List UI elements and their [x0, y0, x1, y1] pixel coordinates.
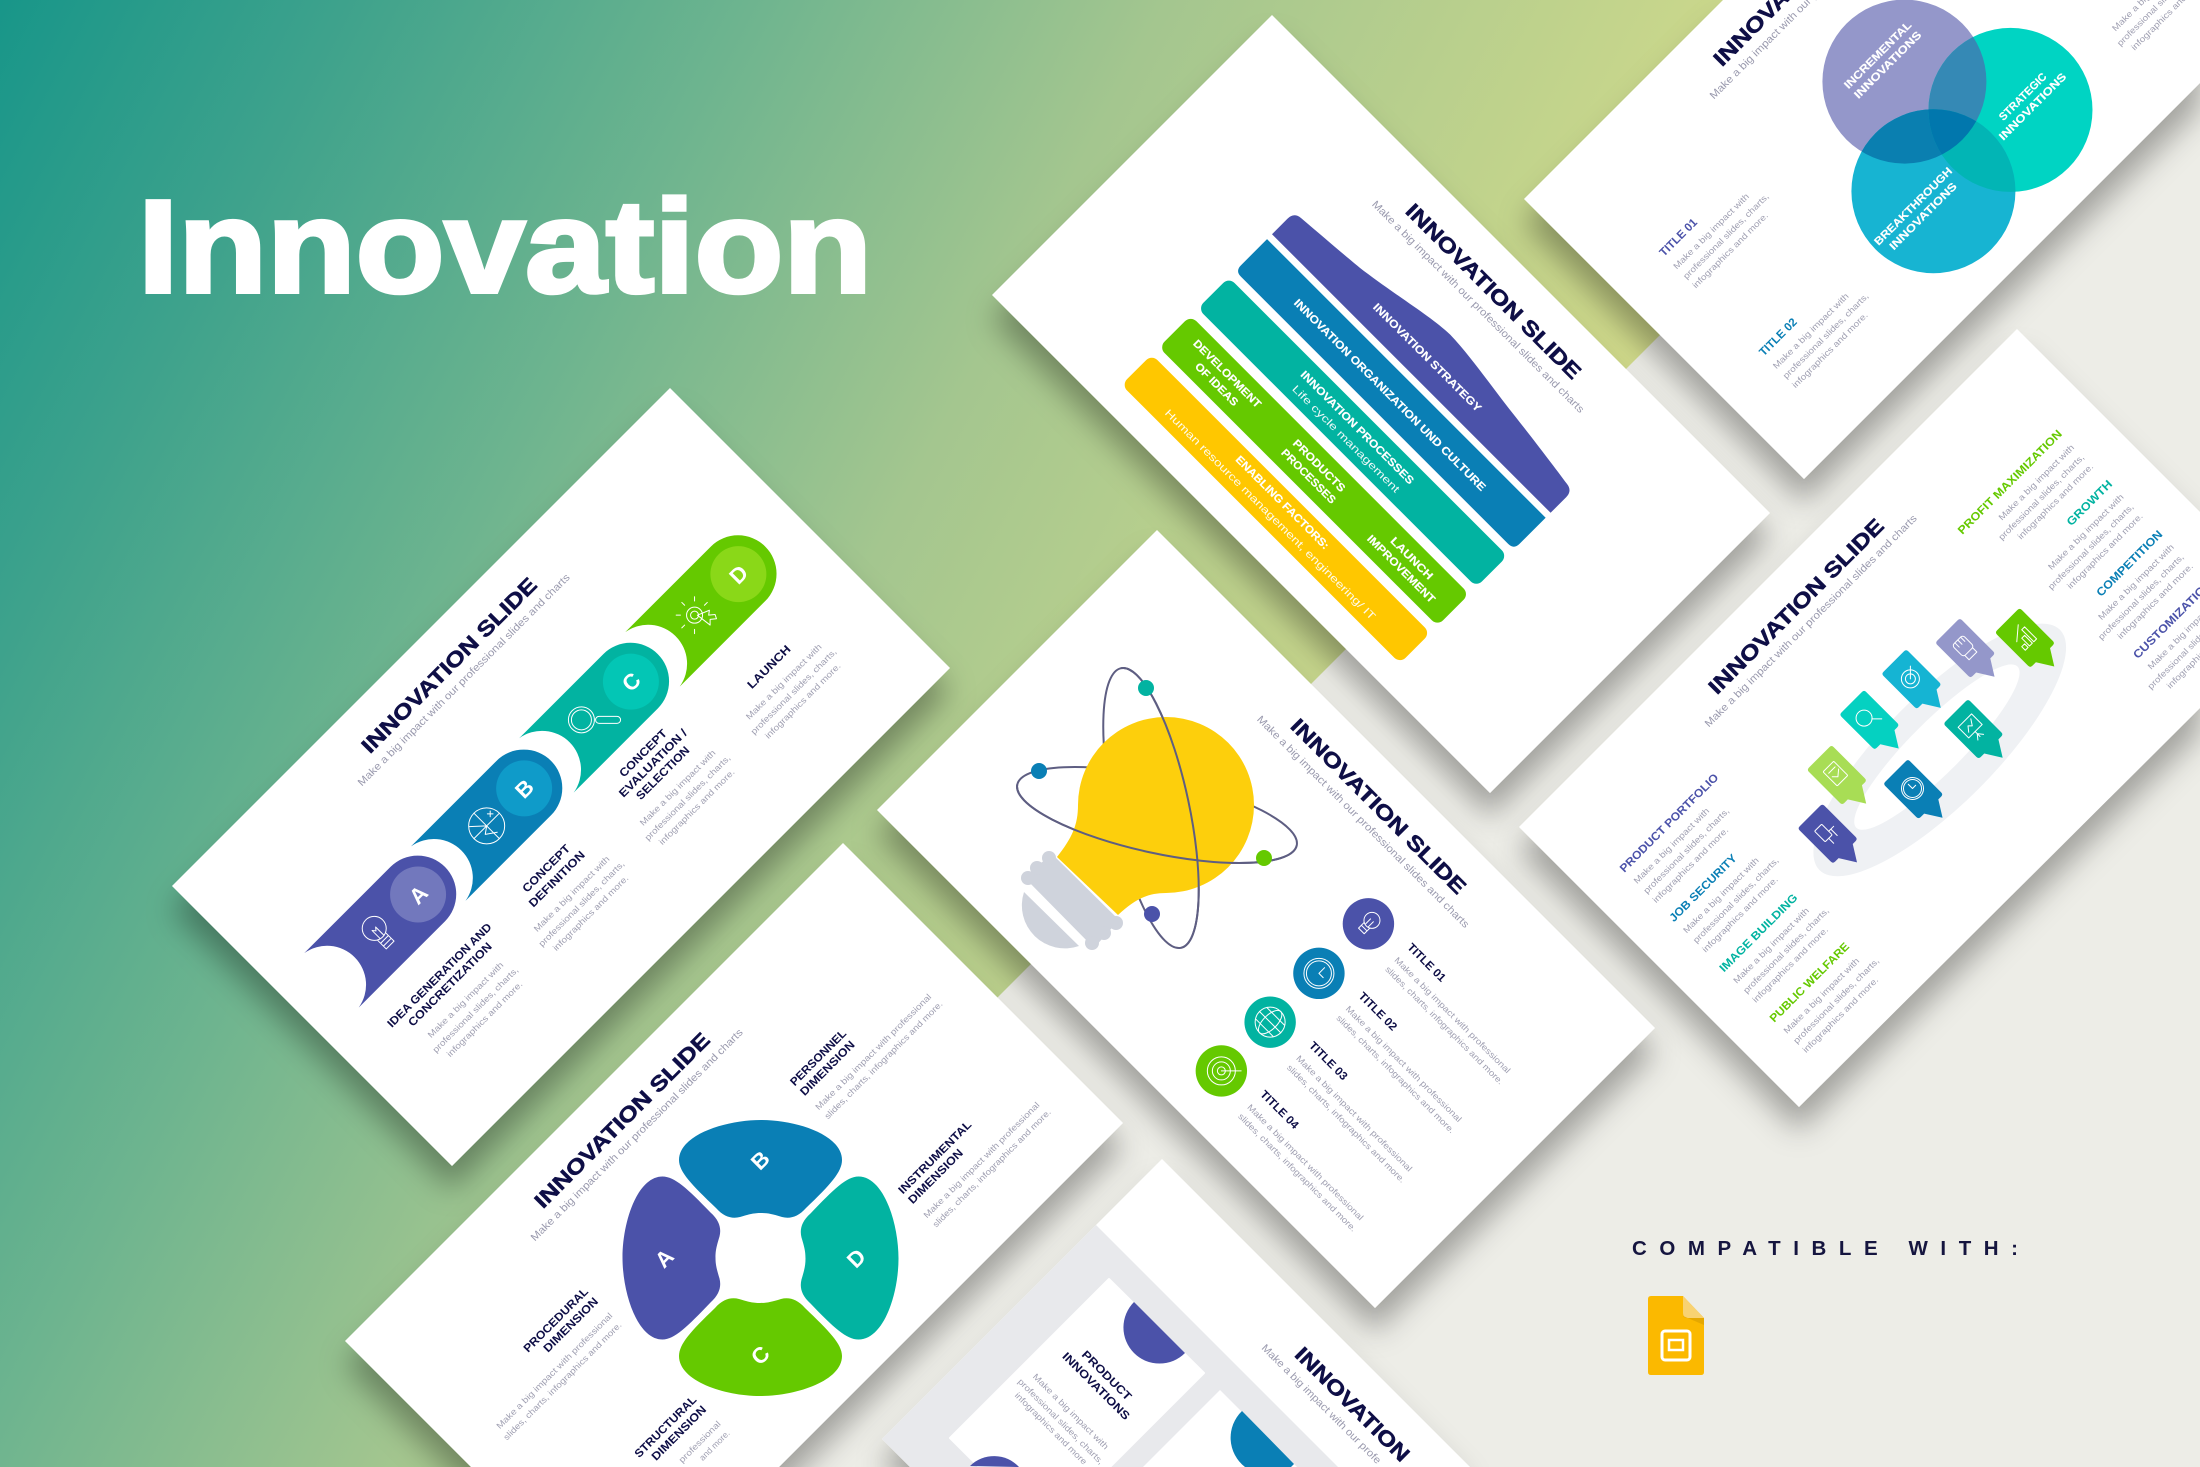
ribbon D: D [724, 560, 753, 589]
layer: organization and culture: INNOVATION ORGANIZATION UND CULTURE [1291, 297, 1488, 494]
main title: Innovation [138, 173, 872, 320]
text block: title 01: slides, charts, infographics and more. [1383, 964, 1506, 1086]
slide: ABCD ribbon process [172, 388, 950, 1166]
slide: venn diagram [1524, 0, 2200, 479]
text block: job security: professional slides, charts, [1691, 855, 1781, 945]
text block: job security: infographics and more. [1700, 874, 1780, 954]
text block: concept evaluation: infographics and more. [657, 767, 737, 847]
layer: innovation processes: INNOVATION PROCESSES [1298, 369, 1416, 487]
layer: enabling factors: ENABLING FACTORS: [1233, 454, 1331, 552]
card text: product innovations: Make a big impact with [1031, 1371, 1111, 1452]
slide card [345, 843, 1123, 1467]
gray panel [882, 1225, 1338, 1467]
text block: title 02 [1334, 990, 1479, 1135]
venn label: incremental: INCREMENTAL [1842, 19, 1915, 92]
ribbon C [519, 627, 685, 793]
text block: profit maximization: PROFIT MAXIMIZATION [1956, 428, 2065, 537]
slide content [1658, 0, 2186, 388]
text block: title 02: infographics and more. [1790, 310, 1870, 390]
petal A: A [650, 1244, 679, 1273]
text block: title 01: infographics and more. [1690, 210, 1770, 290]
text block: image building: IMAGE BUILDING [1718, 892, 1800, 975]
venn label: strategic: INNOVATIONS [1997, 71, 2069, 143]
text block: right column [2105, 0, 2200, 57]
text block: instrumental dimension [897, 1073, 1053, 1229]
text block: growth: GROWTH [2065, 478, 2115, 529]
text block: idea generation: professional slides, charts, [430, 965, 520, 1055]
text block: image building: professional slides, charts, [1741, 905, 1831, 995]
layer: development, products, launch: LAUNCH [1388, 535, 1435, 582]
text block: idea generation: Make a big impact with [425, 960, 506, 1040]
text block: image building [1718, 883, 1840, 1005]
text block: title 03: Make a big impact with professional [1294, 1053, 1414, 1174]
layer: innovation strategy [1272, 195, 1589, 513]
icon circle: clock [1283, 937, 1355, 1010]
text block: concept evaluation [598, 708, 742, 852]
icon: magnifier [563, 689, 624, 750]
text block: title 02: slides, charts, infographics and more. [1334, 1013, 1457, 1135]
ribbon C: C [617, 667, 646, 696]
text block: title 04: slides, charts, infographics and more. [1236, 1111, 1359, 1234]
text block: title 02: Make a big impact with professional [1344, 1004, 1464, 1124]
slide: layered stack [992, 15, 1770, 793]
text block: concept evaluation: EVALUATION / [617, 727, 691, 800]
text block: customization [2123, 578, 2200, 700]
text block: structural dimension: STRUCTURAL [633, 1394, 699, 1461]
slide heading: INNOVATION SLIDE [1704, 514, 1889, 699]
text block: personnel dimension: PERSONNEL [788, 1028, 849, 1089]
text block: public welfare: Make a big impact with [1781, 956, 1861, 1036]
text block: title 01 [1658, 168, 1780, 290]
slide subtitle: Make a big impact with our professional slides and charts [528, 1027, 746, 1244]
card text: product innovations: INNOVATIONS [1059, 1351, 1132, 1423]
layer: development, products, launch: PROCESSES [1278, 447, 1338, 506]
text block: title 03: TITLE 03 [1306, 1040, 1349, 1083]
text block: profit maximization: professional slides, charts, [1996, 452, 2086, 542]
text block: title 02: TITLE 02 [1757, 316, 1800, 359]
text block: profit maximization: Make a big impact with [1996, 442, 2076, 522]
slide heading: INNOVATION [1290, 1343, 1414, 1467]
slide heading: INNOVATION SLIDE [530, 1028, 715, 1213]
layer: innovation processes [1198, 277, 1507, 587]
text block: competition: COMPETITION [2095, 529, 2165, 599]
card text: product innovations: professional slides, charts, [1016, 1376, 1106, 1466]
text block: title 04: TITLE 04 [1257, 1089, 1301, 1132]
tag: presentation board [1943, 699, 2015, 770]
text block: public welfare [1768, 933, 1890, 1055]
tag: clock [1883, 759, 1955, 831]
text block: idea generation: infographics and more. [445, 979, 524, 1059]
text block: instrumental dimension: INSTRUMENTAL [897, 1119, 974, 1197]
slide card [877, 530, 1655, 1308]
text block: title 02: TITLE 02 [1356, 990, 1399, 1033]
layer: development, products, launch: IMPROVEMENT [1364, 533, 1437, 606]
card text: product innovations [1007, 1330, 1152, 1467]
slide text content [1045, 694, 1586, 1235]
ribbon A [304, 840, 472, 1008]
layer: development, products, launch [1159, 316, 1469, 626]
text block: public welfare: professional slides, charts, [1791, 956, 1881, 1045]
venn label: incremental [1842, 19, 1924, 101]
text block: title 01: Make a big impact with [1671, 191, 1751, 271]
text block: concept definition: Make a big impact with [532, 854, 612, 934]
compatible with label: COMPATIBLE WITH: [1632, 1237, 2018, 1260]
text block: competition: infographics and more. [2115, 561, 2195, 641]
text block: growth: infographics and more. [2065, 511, 2145, 591]
petal C: C [746, 1341, 775, 1370]
text block: title 04 [1236, 1089, 1381, 1234]
slide subtitle: Make a big impact with our professional slides and charts [1702, 513, 1920, 730]
card: product innovations [950, 1279, 1204, 1467]
text block: personnel dimension: slides, charts, infographics and more. [822, 999, 945, 1121]
layer: development, products, launch: OF IDEAS [1192, 361, 1240, 409]
text block: title 02: professional slides, charts, [1781, 291, 1870, 381]
illustration: bulb with orbits [1009, 660, 1305, 956]
text block: title 01: TITLE 01 [1658, 216, 1700, 259]
text block: idea generation: CONCRETIZATION [406, 941, 495, 1029]
text block: concept evaluation: CONCEPT [617, 728, 670, 780]
layer: innovation processes: Life cycle management [1289, 383, 1402, 496]
text block: concept definition: professional slides, charts, [537, 859, 626, 949]
venn label: breakthrough: BREAKTHROUGH [1872, 165, 1955, 248]
text block: concept definition: DEFINITION [527, 849, 588, 910]
icon circle: target [1185, 1035, 1258, 1107]
text block: instrumental dimension: Make a big impact with professional [921, 1100, 1042, 1220]
text block: instrumental dimension: DIMENSION [906, 1147, 966, 1207]
text block: concept definition [501, 823, 636, 958]
text block: concept definition: infographics and more. [551, 873, 631, 953]
text block: idea generation: IDEA GENERATION AND [386, 921, 494, 1030]
text block: concept evaluation: Make a big impact with [638, 748, 718, 828]
card text: product innovations: PRODUCT [1079, 1349, 1133, 1403]
icon: compass chart [461, 800, 512, 851]
tag: bar chart [1995, 608, 2066, 679]
text block: title 02 [1757, 268, 1880, 390]
slide text content [1007, 1218, 1414, 1467]
text block: procedural dimension: slides, charts, infographics and more. [501, 1320, 624, 1442]
venn label: strategic: STRATEGIC [1997, 71, 2049, 123]
text block: growth: Make a big impact with [2046, 492, 2126, 572]
half circle: card one top [1123, 1302, 1185, 1364]
card: second card [1143, 1390, 1297, 1467]
text block: procedural dimension: PROCEDURAL [522, 1286, 591, 1355]
petal D: D [842, 1244, 871, 1273]
slide: four petals [345, 843, 1123, 1467]
slide heading: INNOVATION SLIDE [1286, 715, 1470, 899]
text block: product portfolio: Make a big impact with [1631, 806, 1712, 886]
text block: procedural dimension [467, 1286, 624, 1442]
text block: product portfolio [1618, 772, 1752, 905]
ribbon B: B [510, 774, 539, 803]
text block: title 01: professional slides, charts, [1681, 191, 1771, 281]
slide subtitle: Make a big impact with our professional slides and charts [1369, 198, 1586, 416]
text block: title 01 [1383, 942, 1528, 1086]
text block: title 02: Make a big impact with [1771, 291, 1851, 371]
text block: competition: professional slides, charts, [2096, 552, 2186, 642]
slide heading: INNOVATION SLIDE [357, 573, 542, 758]
icon: google slides [1648, 1296, 1704, 1375]
venn label: strategic [1987, 61, 2069, 143]
petal D [801, 1176, 898, 1340]
text block: structural dimension: and more. [697, 1428, 732, 1463]
petal A [622, 1176, 720, 1340]
slide content [225, 440, 865, 1080]
text block: profit maximization: infographics and more. [2015, 461, 2095, 541]
text block: image building: Make a big impact with [1731, 905, 1811, 985]
layer: organization and culture [1235, 239, 1546, 550]
venn label: breakthrough: INNOVATIONS [1887, 181, 1960, 253]
text block: concept evaluation: SELECTION [634, 745, 692, 803]
tag: device [1798, 804, 1869, 875]
slide heading: INNOVATION SLIDE [1401, 200, 1585, 384]
icon: light bulb [357, 911, 399, 953]
slide card [1519, 329, 2200, 1107]
venn label: breakthrough [1872, 165, 1965, 258]
text block: job security [1667, 833, 1790, 955]
slide subtitle: Make a big impact with our professional slides and charts [1254, 713, 1471, 931]
text block: instrumental dimension: slides, charts, infographics and more. [930, 1107, 1053, 1229]
text block: structural dimension [633, 1394, 732, 1467]
ring behind tags [1781, 591, 2099, 909]
text block: structural dimension: professional [677, 1419, 723, 1465]
slide: speech tag ring [1519, 329, 2200, 1107]
venn label: incremental: INNOVATIONS [1852, 29, 1924, 101]
text block: structural dimension: DIMENSION [650, 1404, 709, 1463]
slide card [882, 1159, 1470, 1467]
slide: innovation types cards (cropped) [882, 1159, 1470, 1467]
text block: product portfolio: professional slides, charts, [1641, 806, 1731, 896]
text block: product portfolio: PRODUCT PORTFOLIO [1618, 772, 1721, 875]
text block: growth [2023, 478, 2145, 601]
text block: competition [2073, 529, 2196, 651]
slide text content [397, 894, 1053, 1467]
text block: title 04: Make a big impact with professional [1245, 1102, 1366, 1222]
text block: title 03 [1285, 1040, 1430, 1185]
text block: growth: professional slides, charts, [2046, 502, 2136, 592]
slide content [1121, 144, 1640, 663]
icon circle: bulb [1332, 888, 1405, 960]
layer: innovation strategy: INNOVATION STRATEGY [1370, 301, 1484, 415]
text block: public welfare: PUBLIC WELFARE [1768, 941, 1852, 1025]
text block: competition: Make a big impact with [2096, 542, 2176, 622]
text block: launch: LAUNCH [745, 643, 794, 692]
text block: launch: professional slides, charts, [749, 647, 838, 736]
card text: product innovations: infographics and more [1013, 1390, 1089, 1467]
text block: profit maximization [1956, 428, 2096, 568]
text block: personnel dimension: Make a big impact with professional [813, 992, 933, 1112]
text block: job security: Make a big impact with [1681, 855, 1761, 935]
venn circles [1822, 0, 2092, 274]
text block: image building: infographics and more. [1750, 925, 1830, 1004]
text block: title 01: Make a big impact with professional [1392, 955, 1513, 1075]
slide: light bulb with orbits [877, 530, 1655, 1308]
text block: concept definition: CONCEPT [521, 843, 573, 895]
layer: enabling factors: Human resource management, engineering/ IT [1162, 407, 1378, 623]
layer: development, products, launch: PRODUCTS [1290, 437, 1347, 495]
tag: fist [1935, 618, 2007, 689]
text block: title 01: TITLE 01 [1404, 942, 1448, 985]
petal B: B [746, 1146, 775, 1175]
text block: personnel dimension: DIMENSION [798, 1039, 858, 1098]
ribbon B [411, 734, 578, 901]
half circle: card one bottom [970, 1456, 1019, 1467]
text block: idea generation [386, 921, 538, 1073]
text block: product portfolio: infographics and more. [1651, 825, 1730, 905]
text block: launch: infographics and more. [763, 661, 843, 741]
text block: personnel dimension [788, 965, 945, 1121]
text block: procedural dimension: DIMENSION [542, 1296, 601, 1355]
half circle: card two top [1231, 1411, 1294, 1467]
tag: target [1881, 649, 1953, 721]
slide card [172, 388, 950, 1166]
slide subtitle: Make a big impact with our professional slides and charts [355, 572, 573, 789]
ribbon A: A [404, 880, 433, 909]
tag: document [1807, 745, 1878, 816]
text block: title 03: slides, charts, infographics and more. [1285, 1062, 1407, 1185]
slide card [992, 15, 1770, 793]
layer: development, products, launch: DEVELOPMENT [1190, 338, 1263, 411]
petal B [679, 1120, 842, 1218]
icon: click hand [669, 590, 720, 641]
text block: public welfare: infographics and more. [1800, 975, 1880, 1055]
petal C [679, 1298, 842, 1396]
slide content [1569, 379, 2200, 1055]
text block: concept evaluation: professional slides, charts, [643, 753, 732, 843]
text block: launch [724, 622, 848, 746]
text block: job security: JOB SECURITY [1667, 852, 1740, 925]
text block: procedural dimension: Make a big impact with professional [494, 1311, 614, 1431]
ribbon D [625, 519, 792, 687]
layer: enabling factors [1121, 354, 1430, 663]
slide subtitle: Make a big impact with our profe [1259, 1342, 1383, 1467]
text block: launch: Make a big impact with [744, 642, 824, 722]
tag: magnifier [1839, 690, 1911, 761]
icon circle: globe [1234, 986, 1306, 1058]
slide card [1524, 0, 2200, 479]
